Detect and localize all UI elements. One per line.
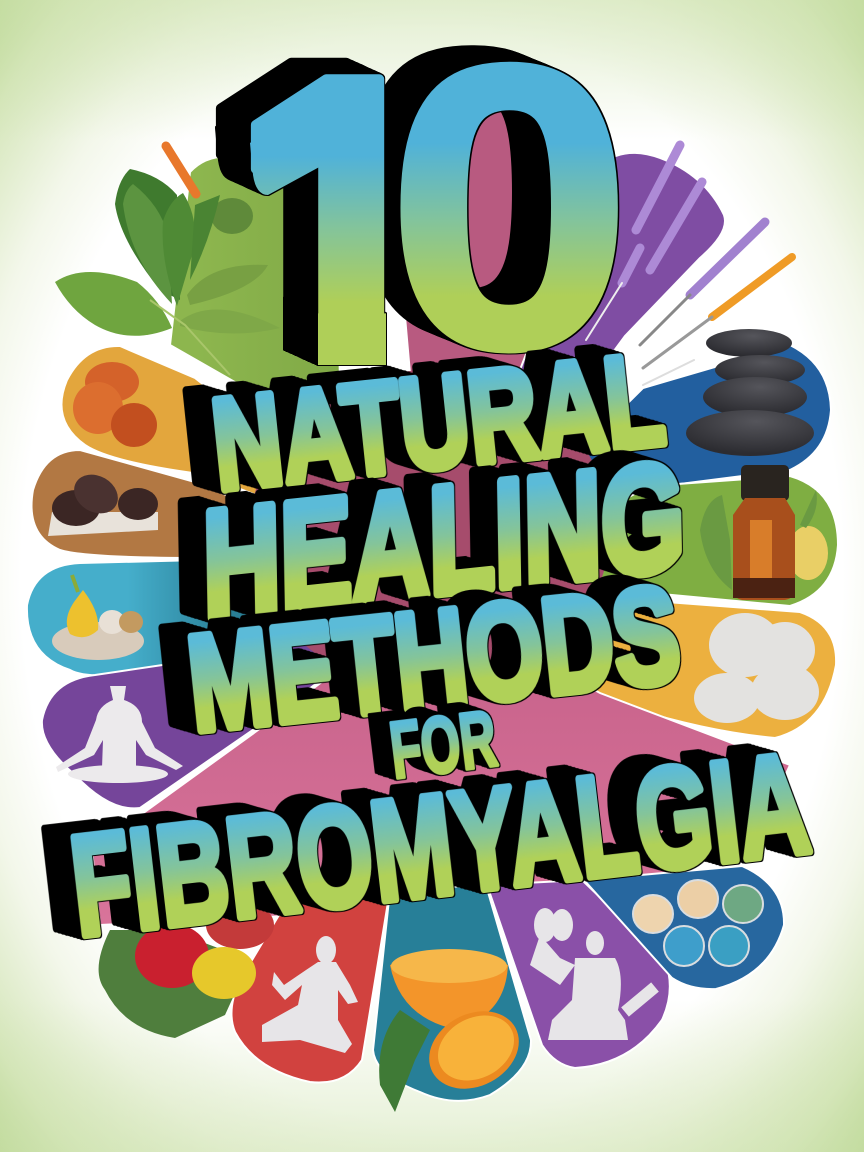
icon: herb leaves	[55, 146, 280, 375]
icon: colored therapy balls	[633, 880, 763, 966]
icon: hot stone stack	[686, 329, 814, 456]
icon: white figure pair on purple	[530, 908, 655, 1040]
orange stick	[166, 146, 196, 194]
panel: large pink wedge	[92, 600, 790, 925]
central dark pink hub	[250, 370, 610, 690]
icon: dark stones on tray	[48, 467, 158, 536]
panel: orange left	[61, 346, 430, 560]
panel: orange right	[430, 600, 836, 738]
panel: red	[231, 890, 390, 1083]
icon: fruit and salad	[99, 901, 274, 1038]
icon: acupuncture needles	[586, 145, 792, 385]
title: FOR: FOR	[385, 694, 501, 795]
panel: wood brown	[32, 450, 430, 580]
icon: essential oil bottle	[700, 465, 828, 600]
numeral 1	[215, 58, 387, 366]
title: 10	[215, 45, 620, 366]
icon: meditating figure	[56, 686, 183, 783]
panel: sky blue	[27, 560, 430, 676]
icon: orange halves	[379, 949, 532, 1112]
panel: acupuncture purple	[430, 153, 725, 600]
panel: hot stones blue	[430, 345, 831, 600]
icon: white stones	[694, 613, 819, 723]
panel: aromatherapy green	[430, 476, 838, 606]
panel: herbs green	[170, 156, 430, 560]
title: NATURAL: NATURAL	[206, 325, 670, 518]
numeral 1: 1	[228, 0, 455, 447]
panel: purple bottom	[487, 880, 670, 1068]
panel: purple meditation	[42, 600, 430, 808]
panel: blue bottom	[584, 866, 784, 989]
title: METHODS: METHODS	[181, 557, 686, 760]
panel: teal	[373, 885, 531, 1101]
panel: top pink wedge	[385, 90, 570, 600]
icon: orange pebbles	[73, 362, 157, 447]
icon: fruit on stone dish	[52, 575, 144, 660]
icon: white figure on red	[262, 936, 358, 1053]
